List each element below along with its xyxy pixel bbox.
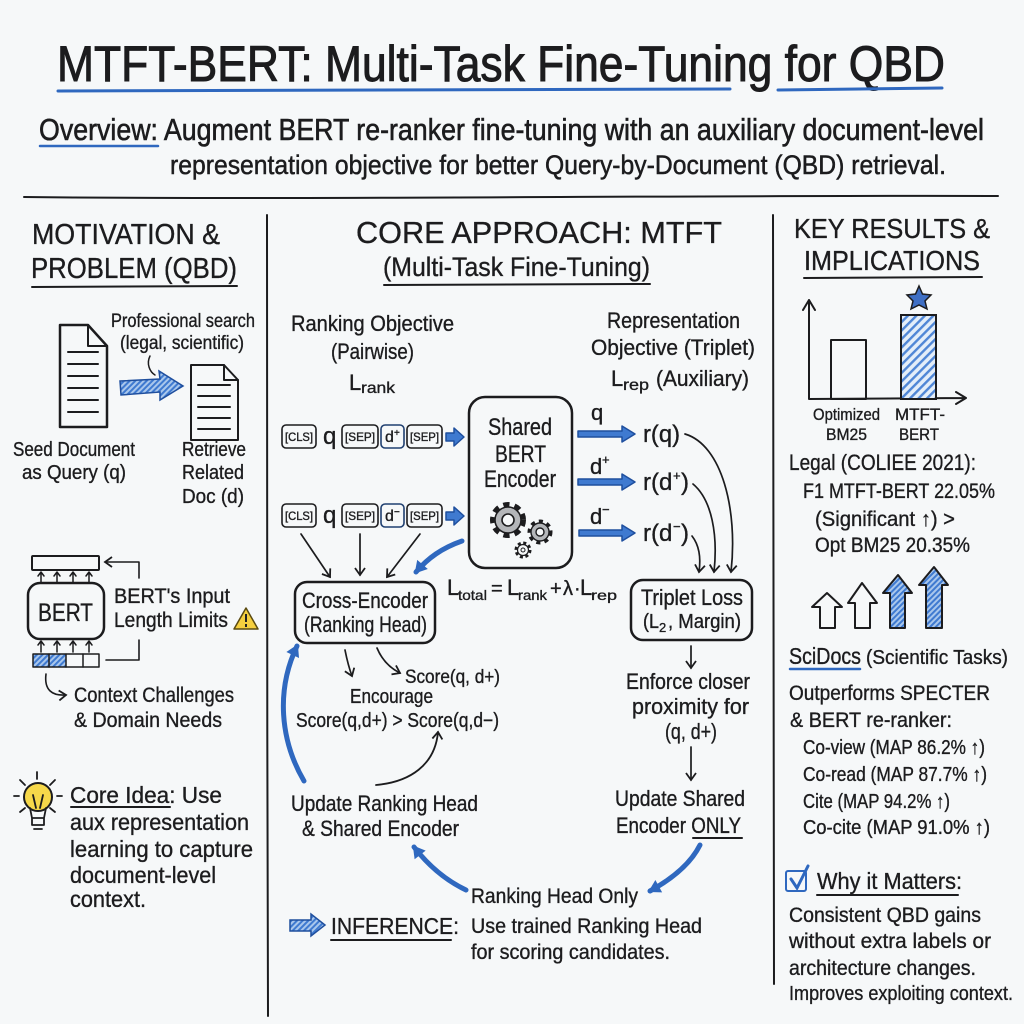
panel: key results [786, 213, 1013, 1005]
text: update shared encoder only: Update Shared [615, 786, 745, 811]
legal results: Opt BM25 20.35% [815, 534, 970, 557]
encoder outputs: d [590, 504, 602, 529]
label: retrieve related doc: Related [182, 462, 244, 484]
input sequence: positive: + [394, 428, 400, 439]
heading: key results: IMPLICATIONS [804, 245, 980, 276]
representation vectors: ) [681, 469, 689, 496]
representation vectors: r(q) [643, 421, 680, 448]
encoder outputs: + [602, 452, 610, 467]
triplet loss [631, 580, 752, 640]
representation vectors: + [673, 468, 681, 483]
text: core idea: learning to capture [70, 836, 253, 862]
heading: key results: KEY RESULTS & [794, 213, 990, 244]
icon: warning [234, 608, 258, 629]
heading: core approach: (Multi-Task Fine-Tuning) [383, 252, 650, 282]
triplet loss: (L [643, 611, 659, 633]
text: professional search: Professional search [111, 311, 255, 332]
scidocs heading: (Scientific Tasks) [866, 647, 1008, 669]
cross-encoder: (Ranking Head) [304, 612, 427, 637]
total loss formula: + [550, 578, 562, 600]
heading: core approach: CORE APPROACH: MTFT [356, 215, 722, 250]
ranking objective: (Pairwise) [331, 339, 414, 364]
total loss formula: total [458, 587, 487, 603]
triplet loss: 2 [659, 620, 666, 635]
arrow: feedback to cross-encoder [283, 646, 304, 781]
encoder outputs: q [591, 400, 603, 425]
input sequence: negative: q [323, 502, 336, 529]
diagram: BERT input limits [28, 556, 139, 695]
icon: up arrows [812, 567, 948, 628]
shared BERT encoder: BERT [495, 441, 546, 468]
representation vectors: r(d [643, 520, 672, 547]
arrow: seed to retrieve [120, 371, 183, 400]
input sequence: positive [282, 423, 464, 450]
total loss formula: rep [591, 587, 617, 603]
heading: key results [794, 213, 990, 278]
ranking objective: L [349, 370, 361, 395]
input sequence: negative: [SEP] [345, 509, 375, 523]
triplet loss: Triplet Loss [641, 585, 743, 610]
shared BERT encoder: Encoder [484, 466, 556, 493]
legal results [789, 450, 995, 557]
arrow: encoder to cross-encoder [416, 541, 462, 572]
representation objective [591, 308, 755, 394]
label: retrieve related doc: Doc (d) [182, 486, 244, 508]
representation vectors [643, 421, 689, 547]
text: update shared encoder only [615, 786, 745, 838]
heading: core approach [356, 215, 722, 285]
input sequence: positive: [SEP] [410, 430, 439, 444]
representation vectors: r(d [643, 469, 672, 496]
arrow: encoder only to ranking head only [650, 845, 700, 891]
icon: seed document [60, 325, 107, 427]
cross-encoder outputs: Score(q, d+) [405, 667, 500, 688]
input sequence: positive: [CLS] [285, 430, 313, 444]
triplet path: proximity for [632, 694, 749, 719]
text: core idea [70, 782, 253, 912]
triplet path: Enforce closer [626, 669, 750, 694]
bar chart: MTFT- [895, 405, 945, 424]
triplet loss: , Margin) [668, 611, 741, 633]
legal results: (Significant ↑) > [815, 508, 955, 531]
input sequence: negative [282, 502, 464, 529]
arrows: inputs to cross-encoder [301, 534, 420, 577]
scidocs results: Co-read (MAP 87.7% ↑) [803, 764, 987, 786]
scidocs results [789, 682, 990, 839]
encoder outputs: − [602, 502, 610, 517]
overview text: representation objective for better Query-by-Document (QBD) retrieval. [170, 150, 946, 180]
input sequence: positive: q [323, 423, 336, 450]
arrows: vectors to triplet loss [685, 434, 733, 572]
total loss formula: L [507, 575, 519, 600]
text: core idea: aux representation [70, 809, 249, 835]
total loss formula [447, 575, 617, 603]
total loss formula: = [491, 578, 503, 600]
why it matters: architecture changes. [789, 957, 976, 980]
total loss formula: · [574, 578, 581, 600]
inference: Use trained Ranking Head [471, 915, 702, 938]
icon: checkbox [786, 866, 808, 891]
representation vectors: − [673, 519, 681, 534]
input sequence: positive: d [385, 429, 394, 446]
bar chart: BM25 [826, 425, 867, 444]
label: seed document [13, 439, 135, 484]
representation objective: Objective (Triplet) [591, 335, 755, 360]
why it matters [788, 868, 1013, 1005]
text: context challenges: & Domain Needs [74, 709, 222, 732]
heading: motivation: PROBLEM (QBD) [31, 253, 237, 285]
text: BERT input length limits: Length Limits [114, 609, 228, 632]
text: context challenges [74, 684, 234, 732]
representation objective: L [611, 366, 623, 391]
icon: gears [493, 505, 550, 557]
cross-encoder: Cross-Encoder [302, 588, 428, 613]
representation objective: rep [623, 377, 649, 394]
label: seed document: Seed Document [13, 439, 135, 461]
scidocs results: Co-cite (MAP 91.0% ↑) [803, 817, 990, 839]
text: core idea: context. [70, 886, 146, 912]
text: update shared encoder only: Encoder ONLY [616, 813, 741, 838]
arrow: feedback to score [376, 732, 438, 785]
icon: star [907, 286, 931, 309]
inference: for scoring candidates. [471, 941, 670, 964]
input sequence: negative: d [385, 508, 394, 525]
ranking objective: Ranking Objective [291, 311, 454, 336]
text: update ranking head [291, 791, 478, 841]
scidocs heading [789, 643, 1008, 669]
text: ranking head only: Ranking Head Only [471, 885, 638, 908]
inference [290, 913, 702, 964]
arrow: ranking head only to encoder [414, 847, 466, 890]
text: BERT input length limits [114, 585, 230, 632]
icon: lightbulb [14, 772, 62, 829]
cross-encoder outputs [296, 648, 500, 732]
overview text [39, 112, 984, 180]
heading: motivation [31, 219, 237, 287]
cross-encoder outputs: Encourage [350, 686, 433, 708]
scidocs heading: SciDocs [789, 643, 861, 669]
input sequence: negative: [CLS] [285, 509, 313, 523]
representation objective: Representation [607, 308, 740, 333]
scidocs results: & BERT re-ranker: [790, 709, 952, 732]
triplet path: (q, d+) [665, 719, 717, 744]
text: update ranking head: Update Ranking Head [291, 791, 478, 816]
encoder outputs: d [590, 454, 602, 479]
cross-encoder outputs: Score(q,d+) > Score(q,d−) [296, 710, 499, 732]
total loss formula: L [580, 575, 592, 600]
scidocs results: Co-view (MAP 86.2% ↑) [803, 737, 985, 759]
bar chart: BERT [899, 425, 939, 444]
diagram: BERT input limits: BERT [38, 599, 93, 627]
label: retrieve related doc: Retrieve [182, 439, 246, 461]
input sequence: negative: − [394, 507, 400, 518]
total loss formula: rank [518, 587, 548, 603]
ranking objective: rank [361, 380, 396, 397]
total loss formula: L [447, 575, 459, 600]
label: seed document: as Query (q) [22, 462, 126, 484]
why it matters: without extra labels or [788, 930, 991, 953]
label: retrieve related doc [182, 439, 246, 508]
text: context challenges: Context Challenges [74, 684, 234, 707]
shared BERT encoder: Shared [488, 414, 552, 441]
why it matters: Consistent QBD gains [789, 904, 981, 927]
input sequence: negative: [SEP] [410, 509, 439, 523]
shared BERT encoder [469, 397, 572, 568]
icon: related document [191, 365, 238, 440]
text: core idea: document-level [70, 862, 216, 888]
representation vectors: ) [681, 520, 689, 547]
encoder outputs [578, 400, 635, 541]
cross-encoder [295, 582, 435, 643]
legal results: F1 MTFT-BERT 22.05% [803, 480, 995, 503]
total loss formula: λ [563, 578, 573, 600]
scidocs results: Outperforms SPECTER [789, 682, 990, 705]
why it matters: Why it Matters: [817, 868, 962, 894]
representation objective: (Auxiliary) [656, 366, 749, 391]
text: core idea: Core Idea: Use [70, 782, 222, 808]
triplet path [626, 646, 750, 780]
bar chart [803, 286, 966, 444]
text: professional search: (legal, scientific) [120, 333, 244, 354]
scidocs results: Cite (MAP 94.2% ↑) [803, 791, 950, 813]
panel: core approach [282, 215, 755, 964]
text: professional search [111, 311, 255, 375]
legal results: Legal (COLIEE 2021): [789, 450, 976, 475]
text: BERT input length limits: BERT's Input [114, 585, 230, 608]
ranking objective [291, 311, 454, 397]
text: update ranking head: & Shared Encoder [302, 816, 459, 841]
bar chart: Optimized [813, 405, 880, 424]
heading: motivation: MOTIVATION & [32, 219, 220, 251]
panel: motivation and problem [13, 219, 258, 912]
inference: INFERENCE: [331, 913, 459, 939]
input sequence: positive: [SEP] [345, 430, 375, 444]
